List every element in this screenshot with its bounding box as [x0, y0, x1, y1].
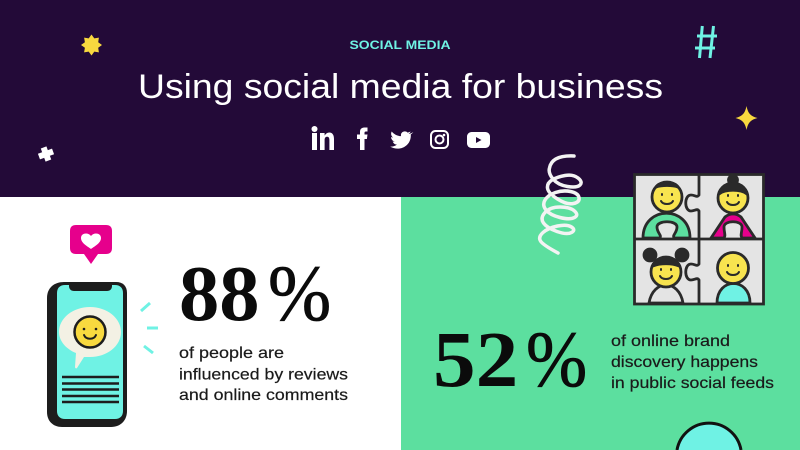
person 1	[643, 182, 690, 238]
social icons row	[312, 126, 490, 150]
icon: yellow star	[81, 34, 102, 56]
icon: spring coil	[540, 156, 581, 253]
smiley	[74, 316, 106, 348]
title: Using social media for business	[138, 68, 663, 106]
icon: linkedin	[312, 126, 334, 150]
icon: yellow sparkle	[736, 106, 758, 130]
icon: instagram	[431, 131, 448, 148]
text: 52% description: in public social feeds	[611, 375, 774, 392]
stat: 88%: 88	[179, 251, 260, 338]
stat: 52%: %	[526, 316, 587, 404]
text: 52% description	[611, 333, 774, 392]
icon: twitter	[390, 131, 413, 149]
illustration: smartphone	[47, 282, 127, 427]
phone body	[47, 282, 127, 427]
icon: hashtag	[695, 26, 717, 58]
decorative circle	[677, 423, 741, 450]
icon: youtube	[467, 132, 490, 148]
person 2	[711, 176, 755, 238]
illustration: puzzle team	[634, 174, 764, 304]
eyebrow label: SOCIAL MEDIA	[350, 38, 451, 52]
heart	[81, 234, 101, 249]
smile faces	[660, 194, 739, 279]
icon: white cross	[37, 145, 55, 163]
text: 52% description: discovery happens	[611, 354, 758, 371]
panel: header background	[0, 0, 800, 197]
text: 88% description	[179, 345, 348, 404]
person 3	[644, 249, 688, 303]
icon: like notification	[70, 225, 112, 264]
person 4	[717, 252, 750, 303]
icon: phone rays	[141, 303, 158, 353]
text lines	[62, 377, 119, 402]
stat: 88%	[179, 250, 331, 338]
text: 88% description: of people are	[179, 345, 284, 362]
puzzle board	[634, 174, 764, 304]
phone screen	[57, 285, 123, 419]
icon: facebook	[357, 128, 368, 150]
stat: 52%: 52	[433, 316, 518, 403]
panel: green stat background	[401, 197, 800, 450]
phone notch	[69, 283, 112, 291]
speech bubble	[59, 307, 121, 368]
stat: 88%: %	[268, 250, 331, 337]
text: 52% description: of online brand	[611, 333, 730, 350]
text: 88% description: influenced by reviews	[179, 366, 348, 384]
stat: 52%	[433, 316, 587, 404]
puzzle grid lines	[634, 174, 764, 304]
text: 88% description: and online comments	[179, 387, 348, 404]
